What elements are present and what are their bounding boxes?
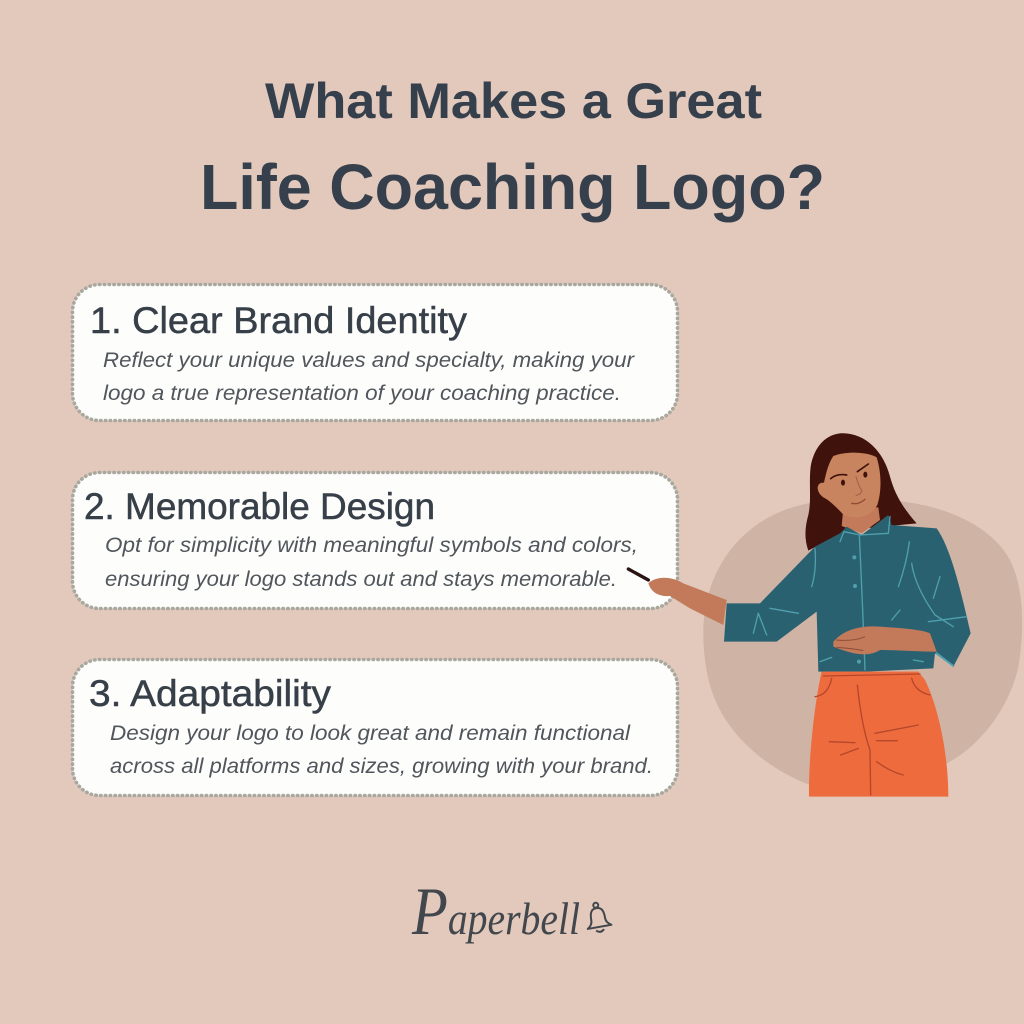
panel: adaptability: Design your logo to look great and remain functional: [110, 722, 631, 745]
background blob: [703, 499, 1022, 788]
buttons: [852, 555, 861, 664]
facial features: [831, 464, 868, 504]
title: Life Coaching Logo?: [200, 151, 825, 223]
icon: bell: [583, 901, 612, 934]
trouser lines: [815, 674, 930, 795]
hair: [805, 433, 917, 551]
hand lines: [836, 637, 865, 651]
neck: [842, 507, 880, 533]
panel: adaptability: across all platforms and sizes, growing with your brand.: [110, 755, 653, 778]
panel: memorable design: ensuring your logo stands out and stays memorable.: [105, 568, 617, 591]
illustration: woman pointing: [628, 433, 971, 797]
panel: clear brand identity: logo a true representation of your coaching practice.: [103, 382, 621, 405]
marker: [628, 569, 648, 580]
panel: adaptability: 3. Adaptability: [89, 673, 332, 714]
shirt: [724, 515, 971, 672]
title: [200, 73, 825, 223]
panel: clear brand identity: 1. Clear Brand Identity: [90, 300, 468, 341]
panel: memorable design: Opt for simplicity with meaningful symbols and colors,: [105, 534, 638, 557]
title: What Makes a Great: [265, 73, 762, 129]
trousers: [809, 672, 948, 797]
shirt lines: [753, 517, 967, 670]
face: [818, 453, 881, 517]
lower arm and hand: [833, 626, 937, 654]
panel: memorable design: 2. Memorable Design: [84, 486, 435, 527]
panel: clear brand identity: [72, 284, 678, 420]
logo: Paperbell: Paperbell: [411, 873, 580, 949]
panel: adaptability: [72, 660, 678, 796]
panel: clear brand identity: Reflect your unique values and specialty, making your: [103, 349, 635, 372]
pointing arm: [648, 578, 727, 625]
panel: memorable design: [72, 472, 678, 608]
